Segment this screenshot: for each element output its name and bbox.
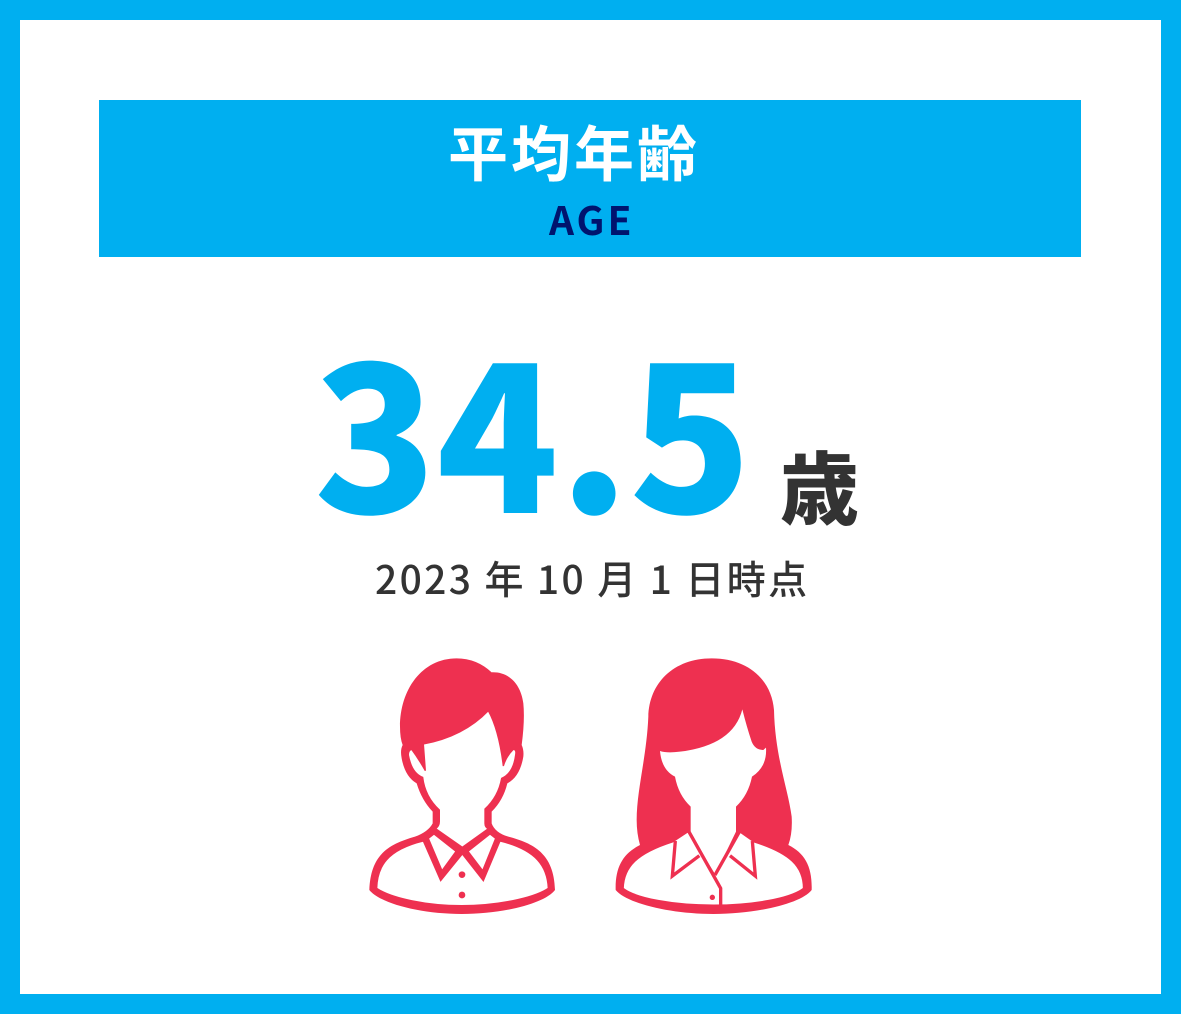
unit: 歳: 歳 — [780, 426, 859, 541]
date note: 2023 年 10 月 1 日時点 — [375, 550, 809, 606]
big number: 34.5: 34.5 — [314, 280, 752, 571]
icon: female employee — [616, 658, 812, 914]
heading: 平均年齢: 平均年齢 — [448, 107, 700, 194]
subheading: AGE: AGE — [549, 191, 634, 247]
header panel — [99, 100, 1081, 257]
icon: male employee — [369, 658, 555, 914]
